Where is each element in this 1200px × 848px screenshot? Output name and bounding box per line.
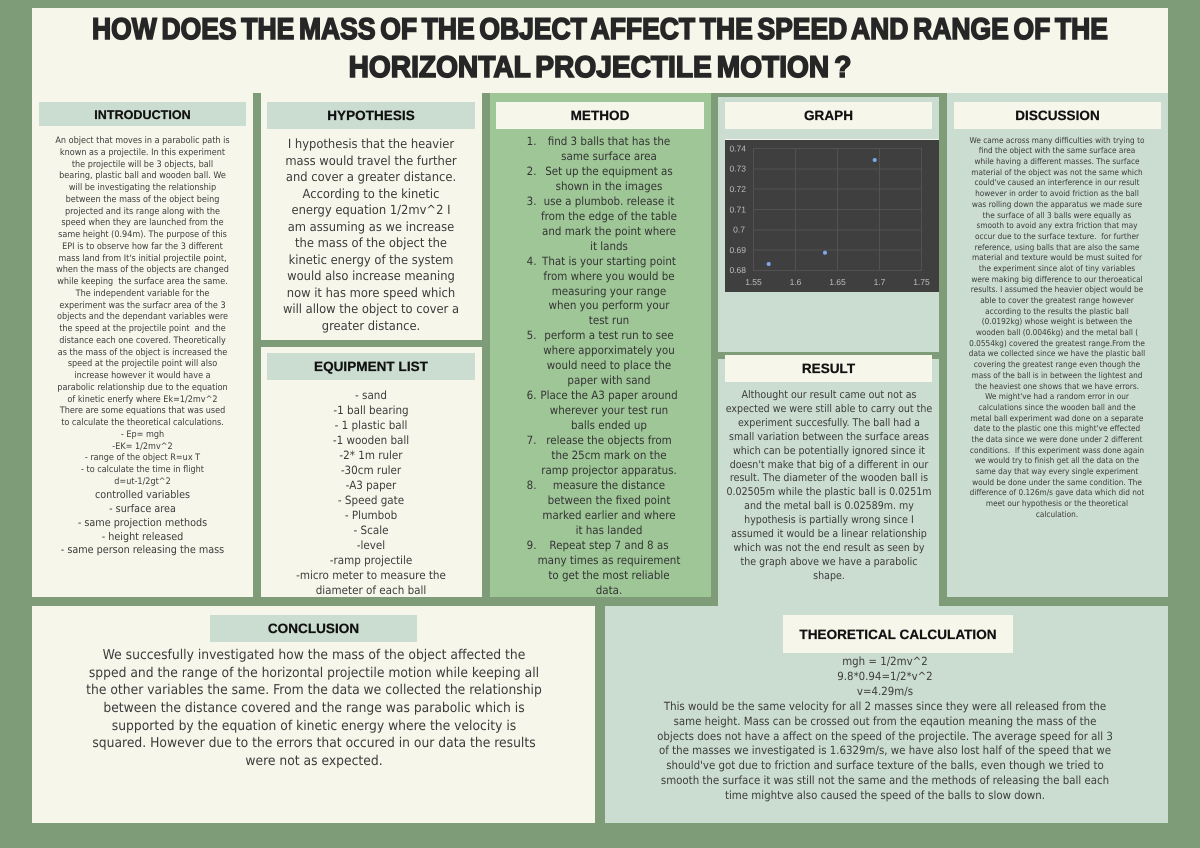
text: discussion: covering the greatest range even though the bbox=[974, 359, 1140, 369]
text: method steps: 6. bbox=[527, 388, 536, 402]
text: method steps: the 25cm mark on the bbox=[551, 448, 667, 462]
heading: equipment list: EQUIPMENT LIST bbox=[314, 359, 428, 374]
text: method steps: find 3 balls that has the bbox=[548, 134, 670, 148]
text: discussion: the experiment since alot of tiny variables bbox=[979, 263, 1135, 273]
text: method steps: and mark the point where bbox=[542, 224, 676, 238]
text: introduction: bearing, plastic ball and wooden ball. We bbox=[59, 171, 226, 181]
text: method steps: 9. bbox=[527, 538, 536, 552]
text: result: small variation between the surface areas bbox=[729, 431, 929, 443]
text: discussion: could've caused an interference in our result bbox=[974, 177, 1140, 187]
text: method steps: from the edge of the table bbox=[541, 209, 677, 223]
main title: HOW DOES THE MASS OF THE OBJECT AFFECT THE SPEED AND RANGE OF THE bbox=[92, 13, 1108, 46]
panel: introduction background bbox=[32, 93, 253, 597]
text: controlled variables bbox=[61, 489, 224, 556]
text: discussion bbox=[969, 135, 1145, 519]
text: method steps: measure the distance bbox=[553, 478, 665, 492]
text: theoretical calculation: smooth the surface it was still not the same and the methods of releasing the ball each bbox=[661, 774, 1109, 787]
scatter chart bbox=[725, 139, 939, 292]
text: equipment list: - 1 plastic ball bbox=[335, 418, 407, 432]
text: method steps: would need to place the bbox=[547, 358, 671, 372]
text: equipment list: -micro meter to measure the bbox=[296, 568, 446, 582]
text: hypothesis: the mass of the object the bbox=[295, 235, 447, 250]
scatter chart: 1.7 bbox=[874, 277, 886, 287]
heading: theoretical calculation: THEORETICAL CALCULATION bbox=[799, 627, 997, 642]
text: method steps: when you perform your bbox=[549, 298, 669, 312]
text: conclusion bbox=[86, 647, 542, 769]
scatter chart: 0.73 bbox=[729, 164, 746, 174]
text: discussion: difference of 0.126m/s gave data which did not bbox=[970, 487, 1144, 497]
panel: discussion background bbox=[947, 93, 1168, 597]
text: introduction: There are some equations that was used bbox=[60, 406, 225, 416]
text: discussion: however in order to avoid friction as the ball bbox=[975, 188, 1139, 198]
text: theoretical calculation: should've got due to friction and surface texture of the balls, even though we tried to bbox=[666, 759, 1103, 772]
text: equipment list: - sand bbox=[355, 388, 387, 402]
heading: conclusion: CONCLUSION bbox=[268, 621, 359, 636]
text: introduction: when the mass of the objects are changed bbox=[56, 265, 229, 275]
heading: result: RESULT bbox=[802, 361, 855, 376]
text: hypothesis: greater distance. bbox=[322, 318, 420, 333]
text: method steps: Place the A3 paper around bbox=[540, 388, 678, 402]
text: result: doesn't make that big of a different in our bbox=[730, 459, 928, 471]
scatter chart: 1.6 bbox=[790, 277, 802, 287]
text: equipment list: -A3 paper bbox=[346, 478, 396, 492]
text: result: and the metal ball is 0.02589m. my bbox=[744, 500, 914, 512]
text: method steps bbox=[527, 134, 680, 597]
scatter chart: 1.55 bbox=[745, 277, 762, 287]
text: discussion: the data since we were done under 2 different bbox=[972, 434, 1142, 444]
panel: hypothesis background bbox=[261, 93, 482, 340]
text: hypothesis: would also increase meaning bbox=[287, 268, 455, 283]
text: method steps: 8. bbox=[527, 478, 536, 492]
text: introduction: as the mass of the object is increased the bbox=[58, 348, 227, 358]
text: method steps: Set up the equipment as bbox=[545, 164, 673, 178]
text: equipment list: - Speed gate bbox=[338, 492, 404, 506]
text: method steps: shown in the images bbox=[556, 179, 662, 193]
text: discussion: were making big difference to our theroeatical bbox=[971, 274, 1143, 284]
heading: hypothesis bbox=[267, 102, 475, 129]
text: method steps: between the fixed point bbox=[548, 493, 670, 507]
text: equipment list: -1 ball bearing bbox=[333, 402, 409, 416]
text: equipment list: - Plumbob bbox=[345, 508, 397, 522]
text: conclusion: were not as expected. bbox=[245, 753, 382, 769]
text: result: experiment succesfully. The ball had a bbox=[738, 417, 920, 429]
text: hypothesis: will allow the object to cover a bbox=[283, 301, 459, 316]
text: discussion: would be done under the same condition. The bbox=[972, 477, 1142, 487]
text: result bbox=[726, 389, 932, 582]
heading: graph bbox=[725, 102, 932, 129]
text: discussion: We came across many difficulties with trying to bbox=[970, 135, 1144, 145]
heading: graph: GRAPH bbox=[804, 108, 853, 123]
text: introduction: experiment was the surfacr area of the 3 bbox=[59, 300, 226, 310]
text: hypothesis: am assuming as we increase bbox=[288, 219, 454, 234]
text: hypothesis: According to the kinetic bbox=[303, 186, 439, 201]
text: controlled variables: - same person releasing the mass bbox=[61, 544, 224, 556]
text: equipment list: diameter of each ball bbox=[316, 582, 426, 596]
text: introduction: The independent variable for the bbox=[76, 289, 209, 299]
text: introduction: of kinetic enerfy where Ek=1/2mv^2 bbox=[67, 394, 218, 404]
text: theoretical calculation: objects does not have a affect on the speed of the projectile. The average speed for all 3 bbox=[657, 730, 1113, 743]
text: discussion: was rolling down the apparatus we made sure bbox=[972, 199, 1142, 209]
text: method steps: balls ended up bbox=[571, 418, 647, 432]
text: introduction: - range of the object R=ux T bbox=[85, 453, 200, 463]
text: discussion: reference, using balls that are also the same bbox=[975, 242, 1139, 252]
text: method steps: it lands bbox=[590, 239, 628, 253]
text: theoretical calculation: time mightve also caused the speed of the balls to slow down. bbox=[725, 789, 1045, 802]
text: theoretical calculation: 9.8*0.94=1/2*v^2 bbox=[837, 670, 932, 683]
text: equipment list: - Scale bbox=[354, 522, 388, 536]
text: discussion: while having a different masses. The surface bbox=[974, 156, 1140, 166]
text: discussion: We might've had a random error in our bbox=[985, 391, 1129, 401]
text: result: which was not the end result as seen by bbox=[733, 542, 924, 554]
text: discussion: occur due to the surface texture. for further bbox=[975, 231, 1139, 241]
text: equipment list: -1 wooden ball bbox=[333, 432, 409, 446]
heading: theoretical calculation bbox=[783, 615, 1013, 653]
heading: discussion: DISCUSSION bbox=[1015, 108, 1100, 123]
text: discussion: material and texture would be must suited for bbox=[972, 252, 1142, 262]
text: result: Althought our result came out not as bbox=[742, 389, 916, 401]
text: introduction: - to calculate the time in flight bbox=[81, 465, 204, 475]
text: method steps: test run bbox=[589, 313, 629, 327]
text: result: the graph above we have a parabolic bbox=[741, 556, 917, 568]
heading: method bbox=[496, 102, 704, 129]
text: introduction: distance each one covered. Theoretically bbox=[59, 336, 226, 346]
text: theoretical calculation: of the masses we investigated is 1.6329m/s, we have also lost half of the speed that we bbox=[659, 744, 1111, 757]
panel: title banner bbox=[32, 8, 1168, 93]
text: discussion: 0.0554kg) covered the greatest range.From the bbox=[969, 338, 1145, 348]
text: introduction: mass land from It's initial projectile point, bbox=[58, 254, 227, 264]
panel: result background bbox=[718, 359, 939, 606]
heading: method: METHOD bbox=[571, 108, 629, 123]
text: controlled variables: controlled variables bbox=[95, 489, 190, 501]
heading: equipment list bbox=[267, 353, 475, 380]
text: discussion: smooth to avoid any extra friction that may bbox=[976, 220, 1138, 230]
text: conclusion: squared. However due to the errors that occured in our data the results bbox=[92, 735, 535, 751]
text: discussion: find the object with the same surface area bbox=[979, 145, 1135, 155]
text: hypothesis: I hypothesis that the heavier bbox=[288, 136, 454, 151]
text: discussion: metal ball experiment wad done on a separate bbox=[971, 413, 1143, 423]
scatter chart: 0.74 bbox=[729, 144, 746, 154]
text: result: hypothesis is partially wrong since I bbox=[744, 514, 914, 526]
text: hypothesis: mass would travel the further bbox=[285, 153, 457, 168]
text: introduction: the projectile will be 3 objects, ball bbox=[72, 160, 213, 170]
text: introduction: will be investigating the relationship bbox=[69, 183, 216, 193]
text: result: 0.02505m while the plastic ball is 0.0251m bbox=[726, 486, 932, 498]
text: result: shape. bbox=[813, 570, 845, 582]
text: hypothesis: and cover a greater distance. bbox=[286, 169, 456, 184]
panel: equipment list background bbox=[261, 347, 482, 597]
scatter chart: 1.75 bbox=[913, 277, 930, 287]
text: discussion: results. I assumed the heavier object would be bbox=[971, 284, 1143, 294]
heading: conclusion bbox=[210, 615, 417, 642]
text: method steps: to get the most reliable bbox=[548, 568, 670, 582]
text: method steps: 2. bbox=[527, 164, 536, 178]
scatter chart: 0.69 bbox=[729, 245, 746, 255]
text: controlled variables: - surface area bbox=[109, 503, 176, 515]
text: discussion: date to the plastic one this might've effected bbox=[974, 423, 1140, 433]
text: introduction: increase however it would have a bbox=[74, 371, 211, 381]
scatter chart: 0.71 bbox=[729, 204, 746, 214]
text: introduction bbox=[55, 136, 230, 487]
text: result: result. The diameter of the wooden ball is bbox=[730, 472, 928, 484]
text: method steps: That is your starting point bbox=[542, 254, 676, 268]
text: equipment list: -ramp projectile bbox=[330, 552, 412, 566]
text: introduction: projected and its range along with the bbox=[65, 206, 220, 216]
text: theoretical calculation: v=4.29m/s bbox=[857, 685, 913, 698]
text: hypothesis: now it has more speed which bbox=[287, 285, 455, 300]
text: discussion: according to the results the plastic ball bbox=[985, 306, 1129, 316]
text: result: assumed it would be a linear relationship bbox=[731, 528, 927, 540]
text: method steps: from where you would be bbox=[543, 269, 675, 283]
text: method steps: 4. bbox=[527, 254, 536, 268]
text: method steps: same surface area bbox=[561, 149, 657, 163]
text: result: expected we were still able to carry out the bbox=[726, 403, 932, 415]
text: discussion: conditions. If this experiment wass done again bbox=[970, 445, 1144, 455]
text: introduction: speed when they are launched from the bbox=[61, 218, 224, 228]
text: theoretical calculation: This would be the same velocity for all 2 masses since they were all released from the bbox=[664, 700, 1106, 713]
text: introduction: EPI is to observe how far the 3 different bbox=[62, 242, 223, 252]
text: discussion: we would try to finish get all the data on the bbox=[975, 455, 1139, 465]
text: method steps: Repeat step 7 and 8 as bbox=[549, 538, 669, 552]
text: hypothesis: kinetic energy of the system bbox=[289, 252, 453, 267]
text: hypothesis bbox=[283, 136, 459, 333]
text: theoretical calculation: same height. Mass can be crossed out from the eqaution meaning the mass of the bbox=[673, 715, 1096, 728]
text: equipment list bbox=[296, 388, 446, 596]
text: method steps: measuring your range bbox=[552, 284, 666, 298]
scatter chart: 0.72 bbox=[729, 184, 746, 194]
text: discussion: data we collected since we have the plastic ball bbox=[969, 348, 1145, 358]
text: controlled variables: - height released bbox=[102, 531, 183, 543]
text: method steps: use a plumbob. release it bbox=[544, 194, 674, 208]
text: method steps: where apporximately you bbox=[543, 343, 675, 357]
panel: method background bbox=[490, 93, 711, 597]
text: method steps: ramp projector apparatus. bbox=[541, 463, 677, 477]
text: method steps: paper with sand bbox=[567, 373, 651, 387]
text: method steps: perform a test run to see bbox=[544, 328, 674, 342]
text: discussion: material of the object was not the same which bbox=[971, 167, 1143, 177]
text: result: which can be potentially ignored since it bbox=[733, 445, 925, 457]
text: discussion: able to cover the greatest range however bbox=[980, 295, 1134, 305]
text: controlled variables: - same projection methods bbox=[78, 517, 207, 529]
panel: graph background bbox=[718, 97, 939, 352]
text: conclusion: We succesfully investigated how the mass of the object affected the bbox=[102, 647, 525, 663]
text: discussion: calculation. bbox=[1036, 509, 1078, 519]
text: theoretical calculation: mgh = 1/2mv^2 bbox=[842, 655, 927, 668]
text: discussion: the heaviest one shows that we have errors. bbox=[975, 380, 1139, 390]
heading: discussion bbox=[954, 102, 1161, 129]
text: theoretical calculation bbox=[657, 655, 1113, 802]
panel: theoretical calculation background bbox=[605, 606, 1168, 823]
text: introduction: while keeping the surface area the same. bbox=[57, 277, 228, 287]
heading: introduction: INTRODUCTION bbox=[94, 108, 191, 122]
text: introduction: d=ut-1/2gt^2 bbox=[114, 477, 171, 487]
text: discussion: (0.0192kg) whose weight is between the bbox=[982, 316, 1132, 326]
text: discussion: calculations since the wooden ball and the bbox=[978, 402, 1136, 412]
text: discussion: same day that way every single experiment bbox=[976, 466, 1138, 476]
heading: result bbox=[725, 355, 932, 382]
text: method steps: 7. bbox=[527, 433, 536, 447]
text: introduction: the speed at the projectile point and the bbox=[59, 324, 226, 334]
text: introduction: known as a projectile. In this experiment bbox=[60, 148, 225, 158]
text: introduction: An object that moves in a parabolic path is bbox=[55, 136, 230, 146]
text: discussion: wooden ball (0.0046kg) and the metal ball ( bbox=[976, 327, 1138, 337]
text: introduction: same height (0.94m). The purpose of this bbox=[58, 230, 227, 240]
text: introduction: to calculate the theoretical calculations. bbox=[61, 418, 224, 428]
text: method steps: many times as requirement bbox=[538, 553, 680, 567]
text: method steps: it has landed bbox=[576, 523, 642, 537]
text: equipment list: -level bbox=[357, 538, 385, 552]
text: introduction: - Ep= mgh bbox=[121, 430, 164, 440]
text: introduction: between the mass of the object being bbox=[66, 195, 219, 205]
text: introduction: speed at the projectile point will also bbox=[68, 359, 217, 369]
text: introduction: objects and the dependant variables were bbox=[57, 312, 228, 322]
scatter chart: 0.68 bbox=[729, 265, 746, 275]
text: discussion: mass of the ball is in between the lightest and bbox=[972, 370, 1142, 380]
text: discussion: the surface of all 3 balls were equally as bbox=[983, 210, 1131, 220]
heading: hypothesis: HYPOTHESIS bbox=[327, 108, 415, 123]
text: discussion: meet our hypothesis or the theoretical bbox=[986, 498, 1128, 508]
text: method steps: marked earlier and where bbox=[542, 508, 676, 522]
text: equipment list: -2* 1m ruler bbox=[339, 448, 403, 462]
text: conclusion: supported by the equation of kinetic energy where the velocity is bbox=[111, 718, 516, 734]
text: conclusion: between the distance covered and the range was parabolic which is bbox=[103, 700, 524, 716]
scatter chart: 0.7 bbox=[733, 224, 745, 234]
text: method steps: 1. bbox=[527, 134, 536, 148]
text: method steps: data. bbox=[596, 583, 622, 597]
heading: introduction bbox=[39, 102, 246, 126]
text: introduction: parabolic relationship due to the equation bbox=[57, 383, 228, 393]
main title bbox=[92, 13, 1108, 84]
text: method steps: wherever your test run bbox=[550, 403, 668, 417]
text: hypothesis: energy equation 1/2mv^2 I bbox=[292, 202, 450, 217]
text: equipment list: -30cm ruler bbox=[341, 462, 401, 476]
text: method steps: 5. bbox=[527, 328, 536, 342]
main title: HORIZONTAL PROJECTILE MOTION ? bbox=[349, 51, 851, 84]
panel: conclusion background bbox=[32, 606, 595, 823]
text: introduction: -EK= 1/2mv^2 bbox=[112, 442, 173, 452]
text: method steps: 3. bbox=[527, 194, 536, 208]
scatter chart: 1.65 bbox=[829, 277, 846, 287]
text: method steps: release the objects from bbox=[546, 433, 672, 447]
text: conclusion: the other variables the same. From the data we collected the relationship bbox=[86, 682, 541, 698]
text: conclusion: spped and the range of the horizontal projectile motion while keeping all bbox=[88, 665, 539, 681]
